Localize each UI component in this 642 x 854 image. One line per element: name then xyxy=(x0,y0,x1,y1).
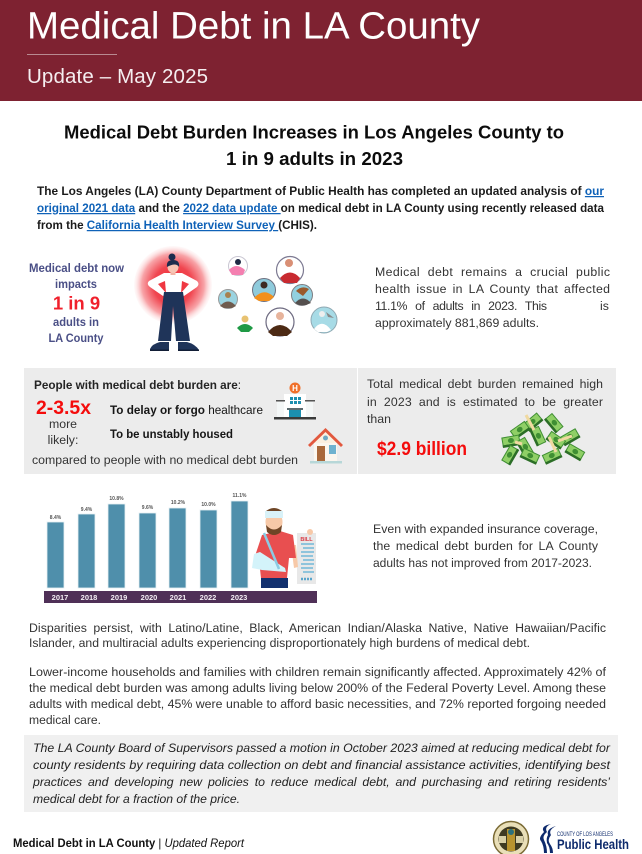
stat: 1 in 9 adults: Medical debt now xyxy=(29,262,125,275)
stat: 2-3.5x: 2-3.5x xyxy=(36,397,91,419)
callout: board motion: practices and developing new policies to reduce medical debt, and purchasing and retiring residents’ xyxy=(32,775,610,789)
panel: total burden: Total medical debt burden remained high xyxy=(367,377,603,391)
text: prevalence: approximately 881,869 adults. xyxy=(375,316,539,330)
stat: 1 in 9 adults: impacts xyxy=(55,278,97,291)
footer label: Medical Debt in LA County | Updated Report xyxy=(13,836,245,850)
bar chart: adults with medical debt 2017-2023: 8.4% xyxy=(50,515,62,521)
text: prevalence: Medical debt remains a crucial public xyxy=(375,265,610,279)
logo: public health: COUNTY OF LOS ANGELES xyxy=(557,832,613,838)
bar chart: adults with medical debt 2017-2023 xyxy=(44,493,317,603)
bar chart: adults with medical debt 2017-2023: 2017 xyxy=(52,593,68,602)
bar chart: adults with medical debt 2017-2023: 2021 xyxy=(170,593,186,602)
panel: likelihood: People with medical debt burden are: xyxy=(34,378,241,392)
stat: 1 in 9 adults xyxy=(29,262,125,345)
subtitle: Update – May 2025 xyxy=(27,65,208,88)
icon: hospital: H xyxy=(292,384,298,393)
text: prevalence: is xyxy=(600,299,609,313)
text: insurance coverage xyxy=(373,522,599,570)
callout: board motion xyxy=(24,735,618,812)
panel: total burden xyxy=(358,368,616,474)
icon: injured man with bill: BILL xyxy=(300,537,313,543)
text: disparities: Disparities persist, with Latino/Latine, Black, American Indian/Alaska Native, Native Hawaiian/Pacific xyxy=(29,621,606,635)
main heading xyxy=(64,122,564,169)
icon: group of people in circles xyxy=(218,256,337,336)
callout: board motion: county residents by requiring data collection on debt and financial assistance activities, identifying best xyxy=(33,758,611,772)
bar chart: adults with medical debt 2017-2023: 2023 xyxy=(231,593,247,602)
panel: likelihood: To be unstably housed xyxy=(110,427,233,441)
intro paragraph: original 2021 data and the 2022 data update on medical debt in LA County using recently released data xyxy=(37,201,604,215)
intro paragraph: from the California Health Interview Survey (CHIS). xyxy=(37,218,317,232)
icon: house xyxy=(308,428,343,464)
text: disparities xyxy=(29,621,606,650)
text: lower-income households: adults with medical debt, 45% were unable to afford basic necessities, and 72% reported forgoing needed xyxy=(29,697,606,711)
icon: hospital xyxy=(274,382,316,420)
callout: board motion: The LA County Board of Supervisors passed a motion in October 2023 aimed at reducing medical debt for xyxy=(33,741,611,755)
bar chart: adults with medical debt 2017-2023: 9.4% xyxy=(81,507,93,513)
text: lower-income households: medical care. xyxy=(29,713,101,727)
header banner xyxy=(0,0,642,101)
intro paragraph: The Los Angeles (LA) County Department of Public Health has completed an updated analysis of our xyxy=(37,184,604,198)
text: disparities: Islander, and multiracial adults experiencing disproportionately high burdens of medical debt. xyxy=(29,636,530,650)
bar chart: adults with medical debt 2017-2023: 2022 xyxy=(200,593,216,602)
icon: woman with red glow xyxy=(134,246,212,351)
text: insurance coverage: Even with expanded insurance coverage, xyxy=(373,522,598,536)
icon: injured man with bill xyxy=(252,508,316,588)
bar chart: adults with medical debt 2017-2023: 2020 xyxy=(141,593,157,602)
logo: county seal xyxy=(494,822,528,854)
stat: 1 in 9 adults: 1 in 9 xyxy=(53,292,100,314)
panel: total burden: in 2023 and is estimated to be greater xyxy=(367,395,603,409)
panel: likelihood: more xyxy=(49,417,77,431)
callout: board motion: medical debt for a fraction of the price. xyxy=(33,792,240,806)
title: Medical Debt in LA County xyxy=(27,6,480,48)
bar chart: adults with medical debt 2017-2023: 2019 xyxy=(111,593,127,602)
stat: 1 in 9 adults: LA County xyxy=(48,332,104,345)
bar chart: adults with medical debt 2017-2023: 9.6% xyxy=(142,505,154,511)
main heading: 1 in 9 adults in 2023 xyxy=(226,148,403,169)
stat: $2.9 billion: $2.9 billion xyxy=(377,438,467,460)
bar chart: adults with medical debt 2017-2023: 10.8% xyxy=(109,496,124,502)
text: lower-income households: the medical debt burden was among adults living below 200% of the Federal Poverty Level. Among these xyxy=(29,681,606,695)
text: prevalence: health issue in LA County that affected xyxy=(375,282,610,296)
panel: likelihood xyxy=(24,368,357,474)
intro paragraph xyxy=(37,184,604,232)
logo: public health xyxy=(540,824,629,853)
panel: likelihood: compared to people with no medical debt burden xyxy=(32,453,298,467)
text: lower-income households xyxy=(29,665,607,727)
text: insurance coverage: adults has not improved from 2017-2023. xyxy=(373,556,592,570)
panel: likelihood: To delay or forgo healthcare xyxy=(110,403,263,417)
icon: pile of money xyxy=(501,412,585,466)
text: prevalence xyxy=(375,265,610,330)
bar chart: adults with medical debt 2017-2023: 11.1% xyxy=(233,493,247,499)
bar chart: adults with medical debt 2017-2023: 10.0% xyxy=(201,502,216,508)
text: lower-income households: Lower-income households and families with children remain significantly affected. Approximately 42% of xyxy=(29,665,607,679)
bar chart: adults with medical debt 2017-2023: 2018 xyxy=(81,593,97,602)
main heading: Medical Debt Burden Increases in Los Angeles County to xyxy=(64,122,564,142)
text: prevalence: 11.1% of adults in 2023. This xyxy=(375,299,547,313)
text: insurance coverage: the medical debt burden for LA County xyxy=(373,539,599,553)
panel: total burden: than xyxy=(367,412,391,426)
bar chart: adults with medical debt 2017-2023: 10.2% xyxy=(171,500,186,506)
stat: 1 in 9 adults: adults in xyxy=(53,316,99,329)
panel: likelihood: likely: xyxy=(48,433,78,447)
